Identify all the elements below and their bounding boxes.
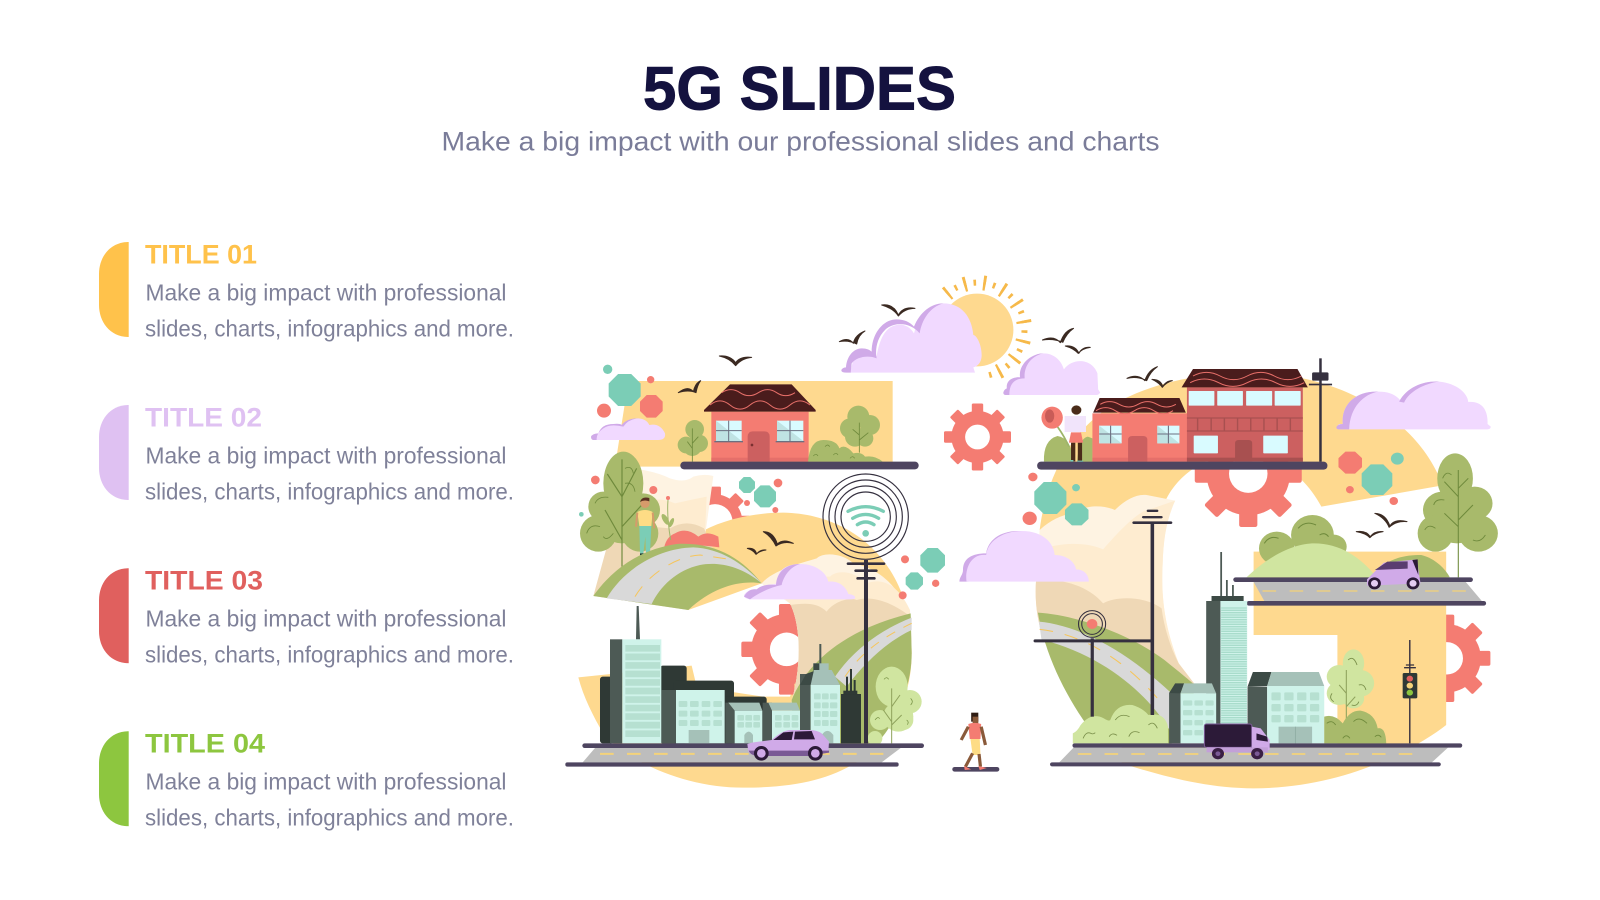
tall tower xyxy=(1206,552,1247,743)
car xyxy=(747,730,829,761)
panel: item 03 xyxy=(99,566,514,668)
mid building xyxy=(1169,683,1216,743)
gear under houses xyxy=(1195,420,1302,527)
illustration: number 5 background xyxy=(615,381,893,557)
tab 03 xyxy=(99,568,129,663)
text 01: slides, charts, infographics and more. xyxy=(145,316,514,342)
tab 01 xyxy=(99,242,129,337)
illustration: 5 bowl and hills xyxy=(578,513,912,788)
black building xyxy=(841,669,861,743)
hill and bush on the upper road xyxy=(1246,515,1450,577)
light tree xyxy=(868,667,922,746)
truck xyxy=(1204,724,1270,759)
flower xyxy=(660,496,675,540)
hexagon dots xyxy=(899,548,945,599)
small buildings xyxy=(725,703,800,743)
icon: sun xyxy=(941,283,1024,376)
panel: item 04 xyxy=(99,728,514,831)
tab 02 xyxy=(99,405,129,500)
tree left of house xyxy=(678,420,708,462)
gear behind the 5 xyxy=(680,487,750,557)
layered landscape xyxy=(1036,495,1197,747)
hexagon dots top xyxy=(579,365,663,517)
light tree xyxy=(1327,649,1374,723)
green bush xyxy=(1324,711,1386,743)
upper arch of the 6 xyxy=(1040,373,1439,540)
birds xyxy=(1356,513,1407,538)
dark backdrop buildings xyxy=(600,666,767,743)
illustration: winding road hill xyxy=(593,532,945,610)
title: 5G SLIDES xyxy=(643,54,956,122)
cloud left of 6 xyxy=(959,531,1089,582)
panel: item 01 xyxy=(99,239,514,342)
large right cloud xyxy=(1336,382,1491,429)
upper road xyxy=(1233,577,1486,606)
bowl of the 5 xyxy=(578,513,912,788)
text 02: slides, charts, infographics and more. xyxy=(145,478,514,504)
light bush xyxy=(1073,705,1168,743)
lower block of the 6 xyxy=(1122,552,1446,788)
illustration: right top scene xyxy=(1003,328,1491,527)
illustration: skateboard platform and walking man xyxy=(952,713,999,772)
big tree right xyxy=(1418,453,1498,577)
road xyxy=(565,743,924,767)
heading 04: TITLE 04 xyxy=(145,728,265,758)
house xyxy=(704,384,816,462)
utility pole xyxy=(847,560,885,743)
birds xyxy=(1043,328,1172,387)
small cloud xyxy=(1003,353,1100,395)
panel: item 02 xyxy=(99,402,514,504)
text 01: Make a big impact with professional xyxy=(146,280,506,306)
traffic light xyxy=(1403,640,1417,743)
subtitle: Make a big impact with our professional slides and charts xyxy=(442,126,1160,156)
heading 03: TITLE 03 xyxy=(145,566,263,596)
top bar of the 5 xyxy=(615,381,893,467)
bush and tree right of house xyxy=(808,406,883,462)
hexagon dots middle xyxy=(739,477,782,513)
antenna pole xyxy=(1309,358,1332,462)
illustration: left top scene xyxy=(579,303,982,559)
heading 02: TITLE 02 xyxy=(145,402,262,432)
small house xyxy=(1092,398,1187,462)
birds xyxy=(678,305,915,393)
illustration: number 6 background xyxy=(959,373,1498,788)
illustration: cream panel with tree and man xyxy=(580,452,727,610)
illustration: left city xyxy=(565,560,924,767)
small lilac car xyxy=(1367,559,1420,589)
flower and woman xyxy=(1041,405,1092,466)
tree xyxy=(580,452,660,567)
cloud xyxy=(744,564,855,599)
text 03: Make a big impact with professional xyxy=(146,606,506,632)
building with door xyxy=(662,690,725,743)
tall tower xyxy=(610,606,661,743)
hexagon dots right xyxy=(1338,452,1404,505)
utility poles with signal xyxy=(1034,510,1172,717)
text 02: Make a big impact with professional xyxy=(146,442,506,468)
layered panel xyxy=(593,470,727,610)
text 04: Make a big impact with professional xyxy=(146,769,506,795)
gear in the 5 xyxy=(741,604,832,695)
tab 04 xyxy=(99,731,129,826)
platform xyxy=(1037,462,1327,470)
text 03: slides, charts, infographics and more. xyxy=(145,642,514,668)
platform xyxy=(680,462,919,469)
wifi rings xyxy=(823,474,908,559)
heading 01: TITLE 01 xyxy=(145,239,257,269)
right building xyxy=(1248,672,1324,743)
big house xyxy=(1182,369,1308,462)
tower right xyxy=(800,644,840,743)
birds xyxy=(747,532,793,554)
big cloud over sun xyxy=(841,303,982,373)
text 04: slides, charts, infographics and more. xyxy=(145,805,514,831)
man xyxy=(636,497,654,555)
small cloud xyxy=(591,418,665,440)
hexagon dots left xyxy=(1023,473,1089,525)
right layered landscape xyxy=(762,554,912,743)
road xyxy=(1050,743,1462,766)
gear beside the 6 xyxy=(1403,615,1490,702)
icon: gear centre xyxy=(944,404,1011,470)
